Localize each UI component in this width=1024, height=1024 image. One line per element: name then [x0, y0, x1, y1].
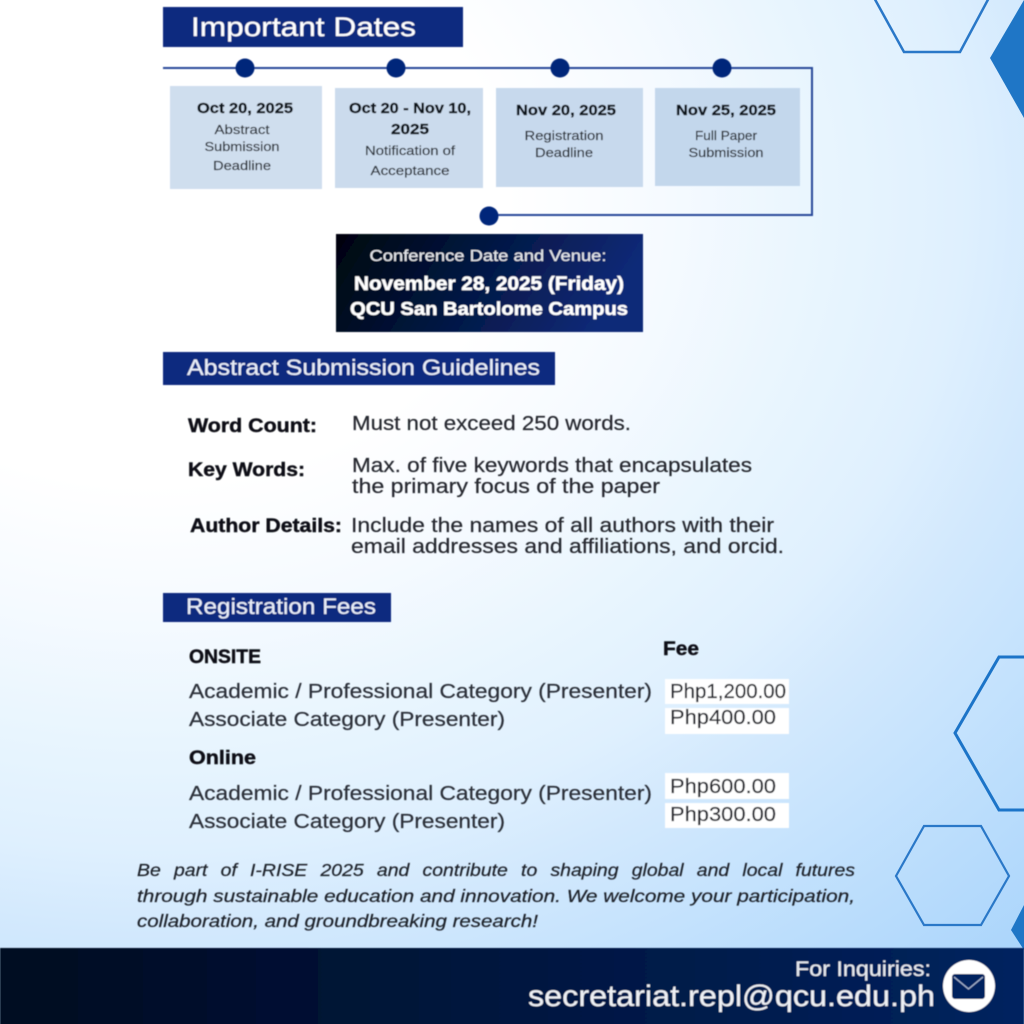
section: registration fees	[163, 593, 789, 833]
hexagon: top right solid	[990, 0, 1024, 118]
guideline: author details	[190, 515, 784, 558]
guideline: word count	[188, 413, 631, 437]
date card: full paper submission: Full Paper	[695, 129, 757, 143]
heading: Abstract Submission Guidelines: Abstract Submission Guidelines	[187, 355, 540, 380]
contact email: secretariat.repl@qcu.edu.ph	[528, 980, 935, 1013]
date card: full paper submission: Submission	[688, 146, 764, 160]
date card: abstract submission: Submission	[204, 140, 280, 154]
conference date and venue box: QCU San Bartolome Campus	[350, 298, 628, 319]
online category: Associate Category (Presenter)	[189, 810, 505, 833]
hexagon: top outline	[872, 0, 991, 52]
onsite category: Academic / Professional Category (Presenter)	[189, 680, 652, 703]
closing invitation text: collaboration, and groundbreaking research!	[137, 911, 538, 931]
date card: registration deadline: Registration	[524, 129, 604, 143]
guideline: key words: the primary focus of the paper	[352, 476, 660, 498]
guideline: author details: Author Details:	[190, 515, 342, 537]
date card: registration deadline	[496, 88, 643, 187]
fee column heading: Fee	[663, 639, 699, 660]
onsite fees	[665, 679, 789, 734]
online category: Academic / Professional Category (Presenter)	[189, 782, 652, 805]
hexagon: bottom right solid	[1011, 905, 1024, 950]
closing invitation text	[137, 860, 855, 931]
date card: full paper submission: Nov 25, 2025	[676, 102, 776, 119]
date card: full paper submission	[655, 88, 800, 186]
date card: abstract submission: Abstract	[214, 123, 270, 137]
guideline: author details: Include the names of all authors with their	[351, 515, 774, 537]
heading: Important Dates: Important Dates	[191, 12, 416, 42]
hexagon: middle right outline	[955, 657, 1024, 810]
conference date and venue box: November 28, 2025 (Friday)	[354, 274, 624, 295]
conference date and venue box: Conference Date and Venue:	[370, 248, 606, 265]
timeline dots	[236, 58, 732, 226]
onsite fees: Php400.00	[670, 707, 776, 729]
closing invitation text: Be part of I-RISE 2025 and contribute to shaping global and local futures	[137, 860, 855, 880]
guideline: word count: Must not exceed 250 words.	[352, 413, 631, 435]
section: abstract submission guidelines	[163, 352, 784, 558]
inquiries label: For Inquiries:	[795, 958, 931, 981]
icon: envelope	[943, 960, 995, 1012]
date card: registration deadline: Nov 20, 2025	[516, 102, 616, 119]
conference date and venue box	[336, 234, 643, 332]
online fees	[665, 773, 789, 828]
date card: abstract submission: Deadline	[213, 159, 271, 173]
date card: registration deadline: Deadline	[535, 146, 593, 160]
decorative hexagons	[872, 0, 1024, 950]
timeline connector	[163, 68, 812, 215]
date card: notification of acceptance: 2025	[391, 121, 429, 138]
guideline: author details: email addresses and affiliations, and orcid.	[351, 536, 784, 558]
heading: Registration Fees: Registration Fees	[186, 594, 376, 619]
heading: Important Dates	[163, 7, 463, 47]
online category: Online	[189, 748, 256, 769]
guideline: key words	[188, 455, 752, 498]
date card: abstract submission	[170, 86, 322, 189]
heading: Abstract Submission Guidelines	[163, 352, 555, 385]
onsite category	[189, 647, 652, 731]
heading: Registration Fees	[163, 593, 391, 622]
online fees: Php300.00	[670, 804, 776, 826]
online fees: Php600.00	[670, 776, 776, 798]
onsite category: ONSITE	[189, 647, 261, 668]
section: important dates	[163, 7, 812, 332]
guideline: key words: Max. of five keywords that encapsulates	[352, 455, 752, 477]
guideline: key words: Key Words:	[188, 459, 305, 481]
hexagon: lower outline	[896, 826, 1009, 925]
date card: abstract submission: Oct 20, 2025	[197, 100, 293, 117]
guideline: word count: Word Count:	[188, 415, 317, 437]
onsite fees: Php1,200.00	[670, 681, 786, 703]
closing invitation text: through sustainable education and innovation. We welcome your participation,	[137, 886, 855, 906]
date card: notification of acceptance: Notification of	[365, 144, 456, 158]
date card: notification of acceptance: Acceptance	[370, 164, 450, 178]
footer bar	[0, 948, 1024, 1024]
date card: notification of acceptance	[335, 88, 483, 188]
onsite category: Associate Category (Presenter)	[189, 708, 505, 731]
online category	[189, 748, 652, 833]
date card: notification of acceptance: Oct 20 - Nov 10,	[349, 100, 471, 117]
